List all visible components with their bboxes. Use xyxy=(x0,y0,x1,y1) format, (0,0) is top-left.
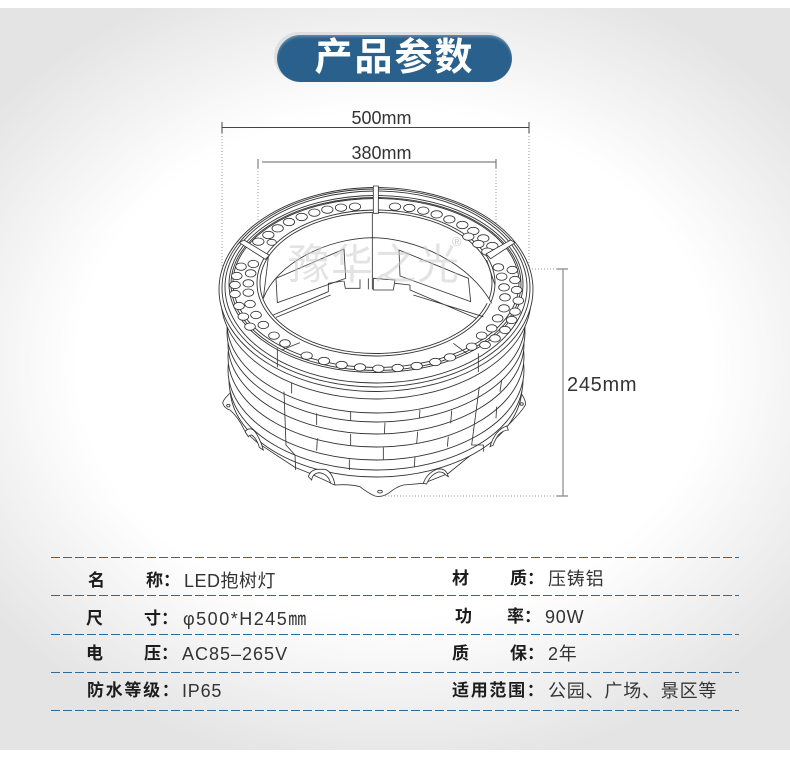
spec: power xyxy=(455,607,584,627)
dimension: 500mm width xyxy=(222,108,529,300)
spec: power: 功 xyxy=(455,607,472,626)
title: 产品参数 xyxy=(277,35,512,82)
mounting hooks xyxy=(245,426,508,485)
dimension: 500mm width: 500mm xyxy=(351,108,412,128)
spec: name: 名 xyxy=(88,571,105,590)
spec: material: 材 xyxy=(452,569,469,588)
spec: waterproof rating: IP65 xyxy=(182,681,222,701)
dimension: 245mm height xyxy=(385,269,637,496)
spec: size: φ500*H245㎜ xyxy=(183,609,308,629)
spec: material: 质： xyxy=(510,569,544,588)
spec: name: 称： xyxy=(146,571,180,590)
spec: warranty: 保： xyxy=(510,644,544,663)
spec: warranty: 质 xyxy=(452,644,469,663)
spec: voltage: 压： xyxy=(144,644,178,663)
title: 产品参数: 产品参数 xyxy=(314,37,474,79)
lamp body brick seams xyxy=(283,372,502,470)
top ring outlines xyxy=(219,188,533,399)
spec: application: 公园、广场、景区等 xyxy=(548,681,717,701)
dimension: 245mm height: 245mm xyxy=(567,374,637,396)
spec: size xyxy=(86,609,308,629)
lamp base flange with mounting tabs xyxy=(223,388,526,496)
spec: waterproof rating xyxy=(87,681,222,701)
spec: name: LED抱树灯 xyxy=(184,571,276,591)
spec: application xyxy=(452,681,717,701)
watermark: 豫华之光 xyxy=(288,231,460,292)
spec: application: 适用范围： xyxy=(452,681,546,700)
spec: material: 压铸铝 xyxy=(548,569,604,589)
LED holes xyxy=(230,203,524,372)
lamp body stacked rings xyxy=(227,233,525,477)
spec: power: 90W xyxy=(545,607,584,627)
spec: voltage: 电 xyxy=(86,644,103,663)
spec: warranty xyxy=(452,644,578,664)
dimension: 380mm width xyxy=(258,143,496,225)
watermark: ® xyxy=(452,234,462,249)
lamp drawing xyxy=(219,186,533,496)
spec: name xyxy=(88,571,276,591)
spec: power: 率： xyxy=(507,607,541,626)
spec: size: 尺 xyxy=(86,609,103,628)
spec: voltage: AC85–265V xyxy=(182,644,288,664)
spec: warranty: 2年 xyxy=(548,644,578,664)
spec: material xyxy=(452,569,604,589)
spec: size: 寸： xyxy=(144,609,178,628)
spec: voltage xyxy=(86,644,288,664)
spec: waterproof rating: 防水等级： xyxy=(87,681,180,700)
dimension: 380mm width: 380mm xyxy=(351,143,412,163)
ring segment dividers xyxy=(239,186,515,372)
lamp inner cavity xyxy=(263,213,495,318)
